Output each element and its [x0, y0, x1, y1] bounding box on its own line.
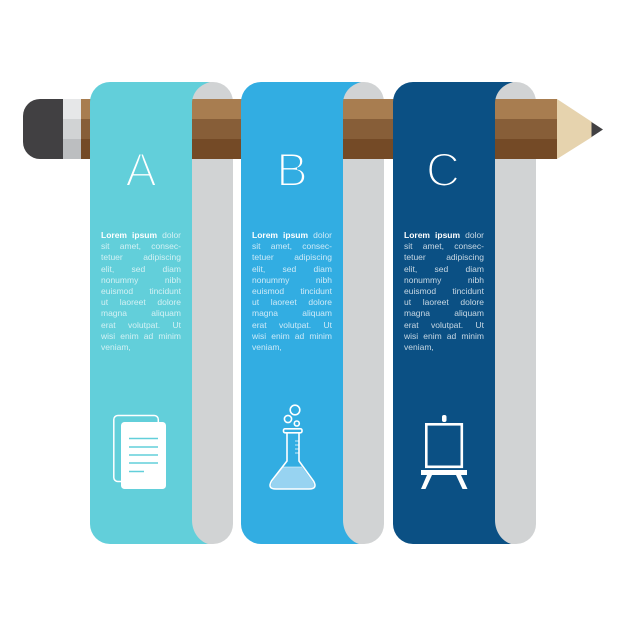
text block B: wisi enim ad minim — [252, 331, 332, 341]
text block B: nonummy nibh — [252, 275, 332, 285]
heading B: B — [276, 143, 308, 196]
text block B: tetuer adipiscing — [252, 252, 332, 262]
text block B — [252, 230, 332, 352]
icon: easel — [421, 415, 468, 489]
text block C: ut laoreet dolore — [404, 297, 484, 307]
heading C: C — [426, 143, 460, 196]
text block C: veniam, — [404, 342, 434, 352]
text block C — [404, 230, 484, 352]
pencil lead — [592, 122, 603, 137]
text block C: euismod tincidunt — [404, 286, 484, 296]
pencil eraser — [23, 99, 63, 159]
text block A: elit, sed diam — [101, 264, 181, 274]
text block B: sit amet, consec- — [252, 241, 332, 251]
text block A: magna aliquam — [101, 308, 181, 318]
panel C — [393, 82, 513, 544]
text block A: tetuer adipiscing — [101, 252, 181, 262]
text block B: Lorem ipsum dolor — [252, 230, 332, 240]
text block A: wisi enim ad minim — [101, 331, 181, 341]
text block A: euismod tincidunt — [101, 286, 181, 296]
text block A: ut laoreet dolore — [101, 297, 181, 307]
pencil tip — [557, 99, 592, 159]
heading A: A — [125, 143, 157, 196]
icon: flask — [270, 405, 315, 489]
text block C: tetuer adipiscing — [404, 252, 484, 262]
pencil body — [81, 99, 557, 159]
text block C: magna aliquam — [404, 308, 484, 318]
text block B: elit, sed diam — [252, 264, 332, 274]
text block B: veniam, — [252, 342, 282, 352]
text block C: nonummy nibh — [404, 275, 484, 285]
text block A: nonummy nibh — [101, 275, 181, 285]
text block C: wisi enim ad minim — [404, 331, 484, 341]
panel A — [90, 82, 210, 544]
text block B: ut laoreet dolore — [252, 297, 332, 307]
icon: documents — [114, 416, 166, 489]
text block A: erat volutpat. Ut — [101, 320, 181, 330]
text block A — [101, 230, 181, 352]
grey ribbon backs — [192, 82, 536, 544]
text block B: erat volutpat. Ut — [252, 320, 332, 330]
text block A: sit amet, consec- — [101, 241, 181, 251]
text block C: sit amet, consec- — [404, 241, 484, 251]
text block C: elit, sed diam — [404, 264, 484, 274]
text block C: Lorem ipsum dolor — [404, 230, 484, 240]
text block A: veniam, — [101, 342, 131, 352]
pencil — [23, 99, 603, 159]
text block C: erat volutpat. Ut — [404, 320, 484, 330]
text block B: magna aliquam — [252, 308, 332, 318]
text block A: Lorem ipsum dolor — [101, 230, 181, 240]
panel B — [241, 82, 361, 544]
pencil ferrule — [63, 99, 81, 159]
text block B: euismod tincidunt — [252, 286, 332, 296]
